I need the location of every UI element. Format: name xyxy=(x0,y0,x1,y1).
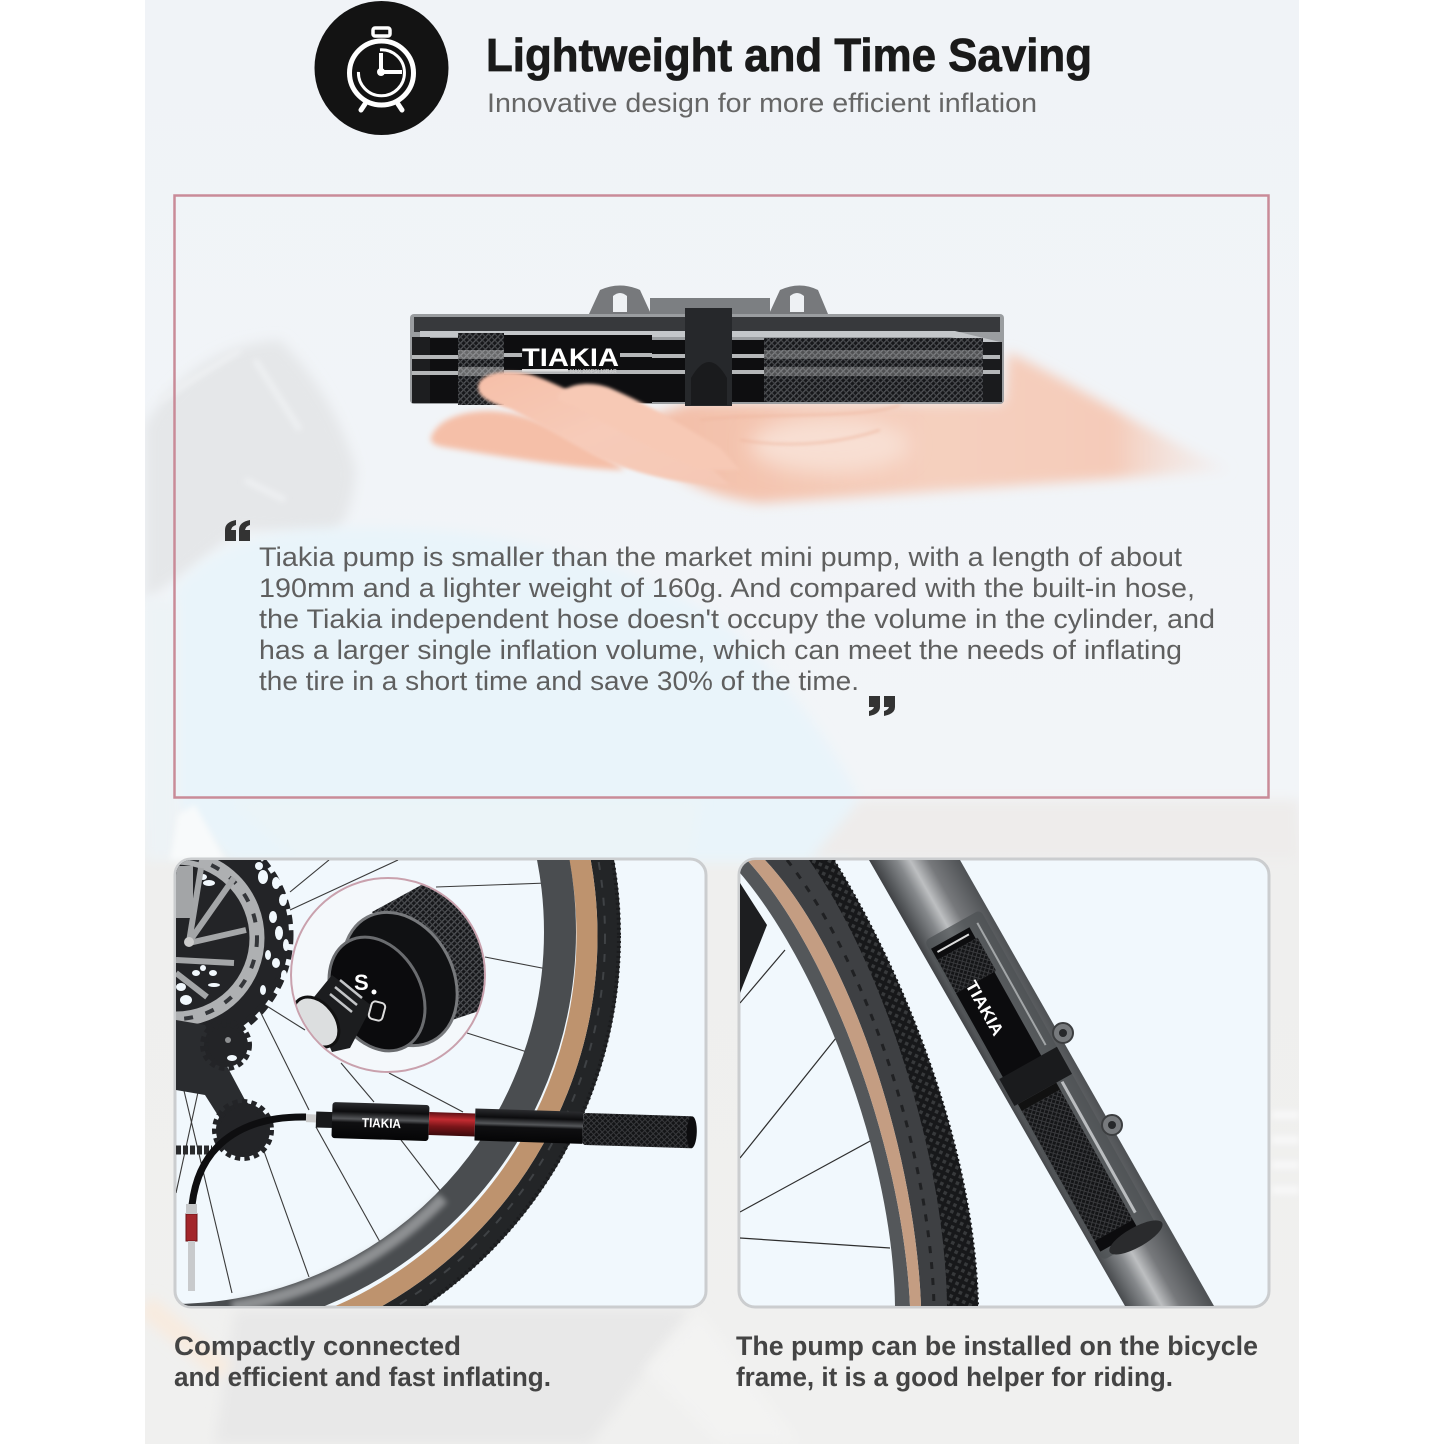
cassette and disc rotor xyxy=(176,860,294,1032)
description text: 190mm and a lighter weight of 160g. And compared with the built-in hose, xyxy=(259,573,1195,603)
mounted pump xyxy=(923,907,1167,1267)
caption: left panel: Compactly connected xyxy=(174,1331,461,1361)
title: Lightweight and Time Saving xyxy=(486,29,1092,81)
subtitle: Innovative design for more efficient inflation xyxy=(487,88,1037,118)
panel: pump mounted on frame xyxy=(739,859,1269,1307)
hand palm xyxy=(640,352,1232,503)
description text: the Tiakia independent hose doesn't occupy the volume in the cylinder, and xyxy=(259,604,1215,634)
caption: left panel xyxy=(174,1331,551,1392)
panel: lightweight description frame xyxy=(174,196,1268,798)
magnifier inset: S xyxy=(354,970,369,995)
description text xyxy=(259,542,1215,696)
pump product photo: TIAKIA xyxy=(522,344,619,372)
panel: pump connected to rear wheel xyxy=(174,858,708,1308)
pump product photo: MAX 260PSI 18BAR xyxy=(570,369,617,375)
hand fingers xyxy=(431,372,740,485)
inflating pump: TIAKIA xyxy=(362,1115,402,1131)
caption: left panel: and efficient and fast inflating. xyxy=(174,1362,551,1392)
front tire and rim xyxy=(740,860,978,1306)
description text: the tire in a short time and save 30% of the time. xyxy=(259,666,859,696)
rear wheel tire and rim xyxy=(183,860,621,1306)
description text: has a larger single inflation volume, which can meet the needs of inflating xyxy=(259,635,1182,665)
pump product photo xyxy=(410,286,1004,406)
magnifier inset xyxy=(284,878,490,1072)
description text: Tiakia pump is smaller than the market mini pump, with a length of about xyxy=(259,542,1183,572)
frame tube xyxy=(869,860,1214,1306)
caption: right panel xyxy=(736,1331,1258,1392)
icon: closing quote xyxy=(869,696,895,716)
hose and valve xyxy=(186,1117,306,1291)
inflating pump xyxy=(305,1101,697,1149)
caption: right panel: frame, it is a good helper for riding. xyxy=(736,1362,1173,1392)
mounting bolts xyxy=(1053,1023,1122,1135)
background with faded cyclist xyxy=(145,0,1299,1444)
wheel spokes and fork xyxy=(740,883,890,1248)
caption: right panel: The pump can be installed on the bicycle xyxy=(736,1331,1258,1361)
rear derailleur xyxy=(176,1020,270,1157)
icon: alarm clock badge xyxy=(314,1,448,135)
icon: opening quote xyxy=(225,520,250,541)
mounted pump: TIAKIA xyxy=(961,977,1007,1039)
